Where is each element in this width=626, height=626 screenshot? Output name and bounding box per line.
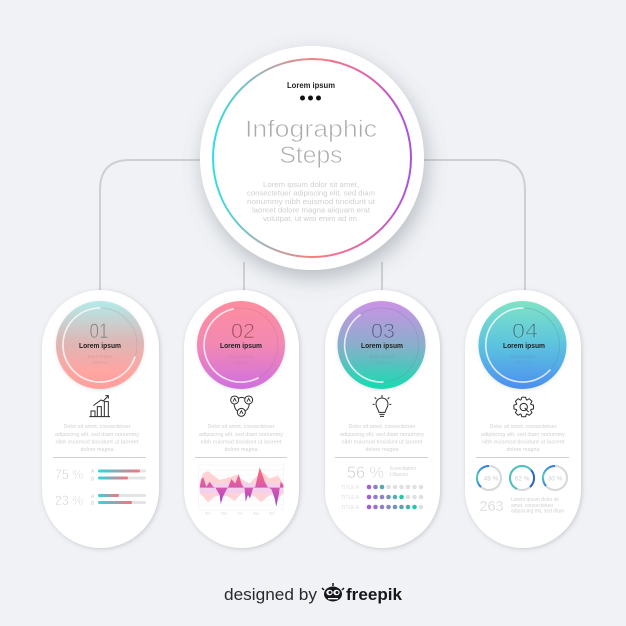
step 4 stat: adipiscing elit, sed diam xyxy=(511,508,564,514)
step 3 dot rating: TITLE A xyxy=(341,485,360,491)
step 4 donut charts: 30 % xyxy=(548,476,563,482)
step 2 description xyxy=(199,424,283,453)
step 3 gradient disc: Lorem ipsum xyxy=(361,343,403,350)
body text: volutpat. ut wisi enim ad im. xyxy=(263,214,359,223)
step 3 description: nibh euismod tincidunt ut laoreet xyxy=(342,440,423,446)
step 4 description: dolore magna xyxy=(507,447,539,453)
step 4 description: Dolor sit amet, consectetuer xyxy=(489,424,557,430)
step 2 gradient disc: Ullamco xyxy=(232,360,250,366)
body text: consectetuer adipiscing elit, sed diam xyxy=(247,188,375,198)
step 3 gradient disc: Ullamco xyxy=(373,360,391,366)
footer credit: designed by xyxy=(224,585,318,604)
area chart: Dec xyxy=(269,511,275,515)
step 1 progress bars: B xyxy=(91,501,95,507)
step 1 gradient disc: Exercitation xyxy=(87,354,113,360)
panel: step 3 xyxy=(325,290,440,548)
step 2 gradient disc xyxy=(197,301,285,389)
step 3 description: adipiscing elit, sed diam nonummy xyxy=(340,432,424,438)
step 1 description: dolore magna xyxy=(81,447,113,453)
step 4 gradient disc xyxy=(478,301,566,389)
step 4 stat: amet, consectetuer xyxy=(511,503,554,509)
step 1 description xyxy=(55,424,139,453)
eyebrow label: Lorem ipsum xyxy=(287,81,335,90)
step 2 gradient disc: 02 xyxy=(231,320,255,343)
icon: connected network xyxy=(231,396,253,416)
panel: central title circle xyxy=(200,46,424,270)
step 3 gradient disc xyxy=(338,301,426,389)
step 3 gradient disc: Exercitation xyxy=(369,354,395,360)
area chart: Sep xyxy=(253,511,259,515)
area chart xyxy=(199,465,284,515)
step 2 description: adipiscing elit, sed diam nonummy xyxy=(199,432,283,438)
step 2 gradient disc: Exercitation xyxy=(228,354,254,360)
body text: nonummy nibh euismod tincidunt ut xyxy=(247,197,376,206)
step 4 donut charts: 48 % xyxy=(484,476,499,482)
step 1 description: Dolor sit amet, consectetuer xyxy=(63,424,131,430)
area chart: Nov xyxy=(205,511,211,515)
step 4 gradient disc: 04 xyxy=(512,320,538,343)
step 1 progress bars: A xyxy=(91,494,95,500)
step 3 description: Dolor sit amet, consectetuer xyxy=(348,424,416,430)
connector lines xyxy=(100,160,525,292)
body text: Lorem ipsum dolor sit amet, xyxy=(263,180,359,189)
step 1 progress bars xyxy=(55,466,146,508)
step 1 gradient disc xyxy=(56,301,144,389)
step 1 gradient disc: 01 xyxy=(90,320,108,343)
step 3 dot rating xyxy=(341,463,423,511)
step 4 description: nibh euismod tincidunt ut laoreet xyxy=(482,440,565,446)
step 2 description: Dolor sit amet, consectetuer xyxy=(207,424,275,430)
gradient ring xyxy=(213,59,411,257)
area chart: Jun xyxy=(237,511,243,515)
step 3 description: dolore magna xyxy=(366,447,398,453)
step 1 progress bars: B xyxy=(91,476,95,482)
step 3 description xyxy=(340,424,424,453)
step 2 gradient disc: Lorem ipsum xyxy=(220,343,262,350)
step 2 description: nibh euismod tincidunt ut laoreet xyxy=(200,440,282,446)
step 3 dot rating: TITLE A xyxy=(341,495,360,501)
area chart: Mar xyxy=(221,511,228,515)
footer credit: freepik xyxy=(346,585,403,604)
step 4 gradient disc: Ullamco xyxy=(514,360,532,366)
step 4 stat: Lorem ipsum dolor sit xyxy=(511,497,559,503)
step 3 gradient disc: 03 xyxy=(371,320,395,343)
step 3 dot rating: Exercitation xyxy=(390,466,416,472)
title xyxy=(245,116,377,169)
panel: step 4 xyxy=(465,290,581,548)
body text xyxy=(247,180,376,223)
step 1 progress bars: A xyxy=(91,469,95,475)
step 1 description: adipiscing elit, sed diam nonummy xyxy=(55,432,139,438)
icon: gear xyxy=(514,397,533,417)
step 1 description: nibh euismod tincidunt ut laoreet xyxy=(56,440,139,446)
step 4 donut charts: 62 % xyxy=(515,476,530,482)
three dots xyxy=(300,96,321,100)
step 4 description xyxy=(481,424,565,453)
step 4 stat: 263 xyxy=(480,498,504,515)
icon: rising bar chart xyxy=(89,396,110,417)
panel: step 2 xyxy=(184,290,299,548)
step 2 description: dolore magna xyxy=(225,447,257,453)
icon: freepik mascot xyxy=(322,583,344,602)
step 4 gradient disc: Exercitation xyxy=(510,354,536,360)
footer credit xyxy=(224,583,403,604)
step 4 donut charts xyxy=(477,466,567,490)
step 1 gradient disc: Ullamco xyxy=(91,360,109,366)
step 3 dot rating: TITLE A xyxy=(341,505,360,511)
step 1 progress bars: 23 % xyxy=(55,492,83,508)
icon: light bulb xyxy=(373,395,391,416)
step 1 gradient disc: Lorem ipsum xyxy=(79,343,121,350)
step 4 description: adipiscing elit, sed diam nonummy xyxy=(481,432,565,438)
body text: laoreet dolore magna aliquam erat xyxy=(252,206,371,214)
step 3 dot rating: 56 % xyxy=(347,463,384,482)
step 4 gradient disc: Lorem ipsum xyxy=(503,343,545,350)
panel: step 1 xyxy=(42,290,159,548)
title: Steps xyxy=(280,142,342,169)
step 4 stat xyxy=(480,497,564,515)
title: Infographic xyxy=(245,116,377,143)
step 1 progress bars: 75 % xyxy=(55,466,83,482)
step 3 dot rating: Ullamco xyxy=(390,472,408,478)
